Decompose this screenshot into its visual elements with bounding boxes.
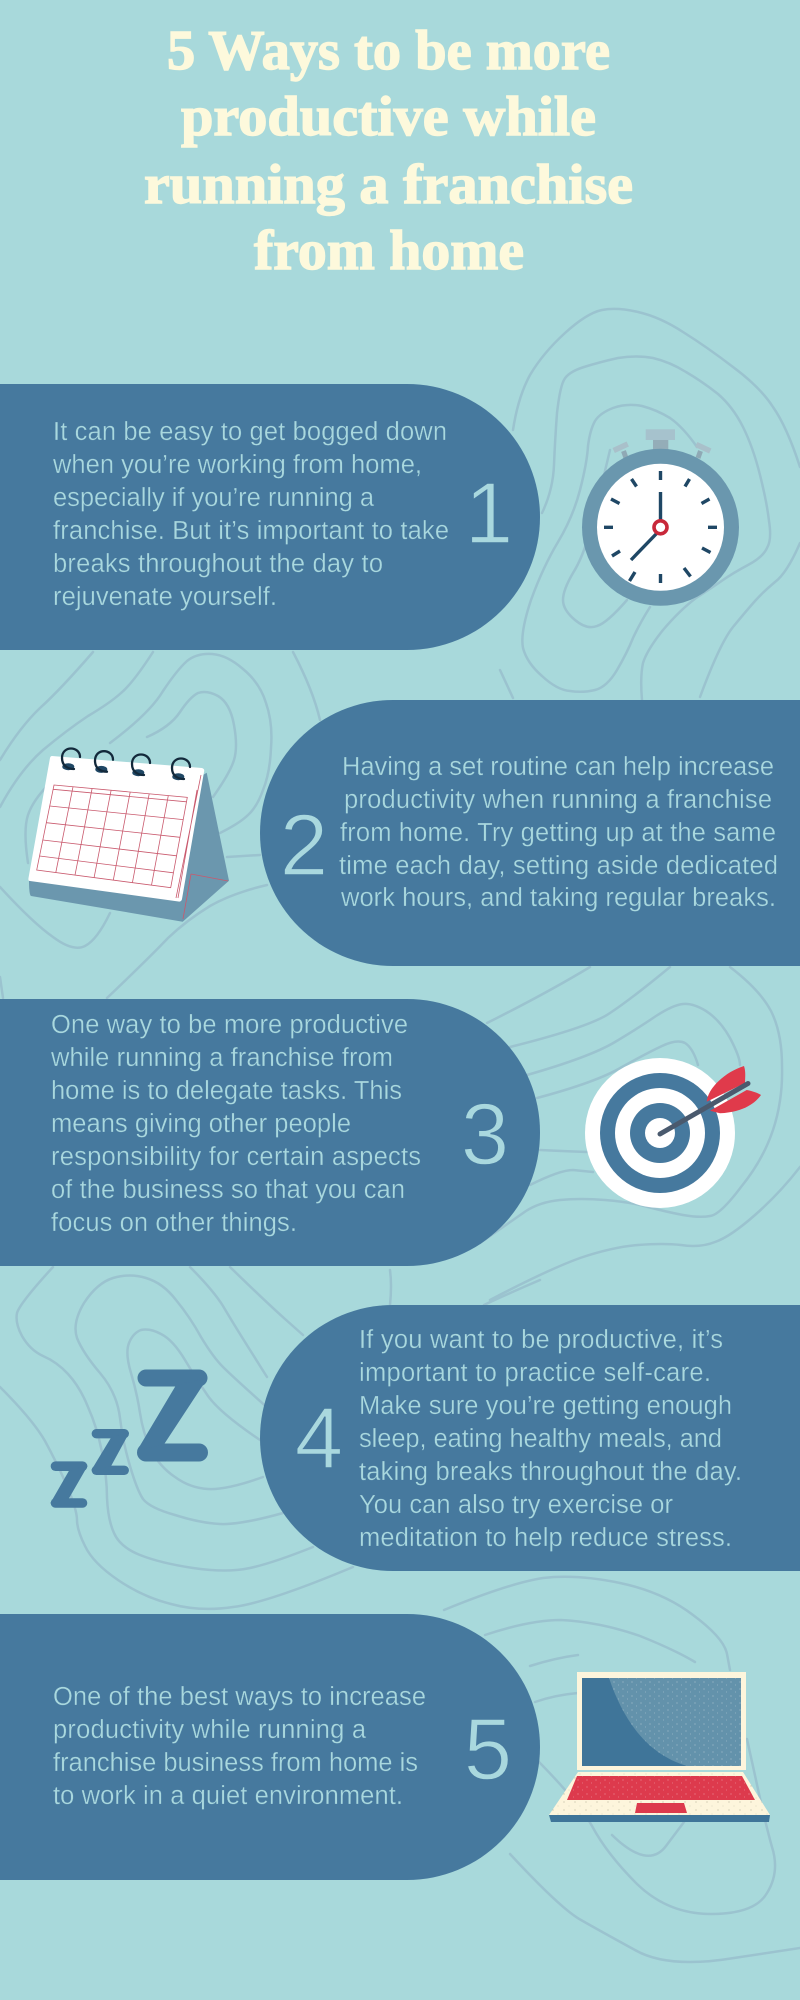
tip 2 text: time each day, setting aside dedicated [339,852,778,880]
tip 3 text: of the business so that you can [51,1176,405,1204]
tip 2 text: Having a set routine can help increase [342,753,774,781]
tip 5 text [53,1683,426,1810]
number 1: 1 [465,465,513,562]
title: 5 Ways to be more [167,20,610,82]
tip 3 text [50,1011,421,1237]
tip 2 text: productivity when running a franchise [344,786,772,814]
panel: tip 2 routine [260,700,800,966]
tip 3 text: focus on other things. [51,1209,297,1237]
panel: tip 3 delegate [0,999,540,1266]
tip 5 text: franchise business from home is [53,1749,418,1777]
tip 1 text: rejuvenate yourself. [53,583,277,611]
tip 2 text [339,753,778,912]
tip 5 text: One of the best ways to increase [53,1683,426,1711]
icon: desk calendar [28,748,229,922]
tip 4 text: sleep, eating healthy meals, and [359,1425,722,1453]
tip 2 text: from home. Try getting up at the same [340,819,776,847]
icon: target with arrow [585,1058,761,1208]
panel: tip 4 self-care [260,1305,800,1571]
calendar binding rings [62,748,190,780]
tip 1 text: breaks throughout the day to [53,550,383,578]
tip 4 text: You can also try exercise or [359,1491,674,1519]
title [144,20,633,282]
tip 4 text: important to practice self-care. [359,1359,711,1387]
tip 3 text: responsibility for certain aspects [51,1143,421,1171]
tip 5 text: to work in a quiet environment. [53,1782,403,1810]
title: from home [254,220,524,282]
tip 3 text: home is to delegate tasks. This [51,1077,402,1105]
number 4: 4 [295,1390,343,1487]
tip 3 text: while running a franchise from [50,1044,393,1072]
icon: sleeping z letters [51,1378,207,1503]
tip 4 text: taking breaks throughout the day. [359,1458,742,1486]
title: running a franchise [144,154,633,216]
title: productive while [181,86,596,148]
tip 1 text: It can be easy to get bogged down [53,418,447,446]
number 3: 3 [461,1086,509,1183]
tip 4 text: Make sure you’re getting enough [359,1392,732,1420]
tip 1 text: when you’re working from home, [52,451,422,479]
tip 4 text: If you want to be productive, it’s [359,1326,723,1354]
tip 1 text: especially if you’re running a [53,484,375,512]
panel: tip 5 quiet environment [0,1614,540,1880]
number 5: 5 [464,1701,512,1798]
tip 1 text [52,418,449,611]
icon: stopwatch [582,429,739,606]
tip 3 text: means giving other people [51,1110,351,1138]
tip 5 text: productivity while running a [53,1716,367,1744]
tip 4 text: meditation to help reduce stress. [359,1524,732,1552]
panel: tip 1 take breaks [0,384,540,650]
icon: laptop [549,1672,770,1822]
tip 1 text: franchise. But it’s important to take [53,517,449,545]
tip 2 text: work hours, and taking regular breaks. [340,884,776,912]
tip 4 text [359,1326,742,1552]
tip 3 text: One way to be more productive [51,1011,408,1039]
number 2: 2 [280,797,328,894]
